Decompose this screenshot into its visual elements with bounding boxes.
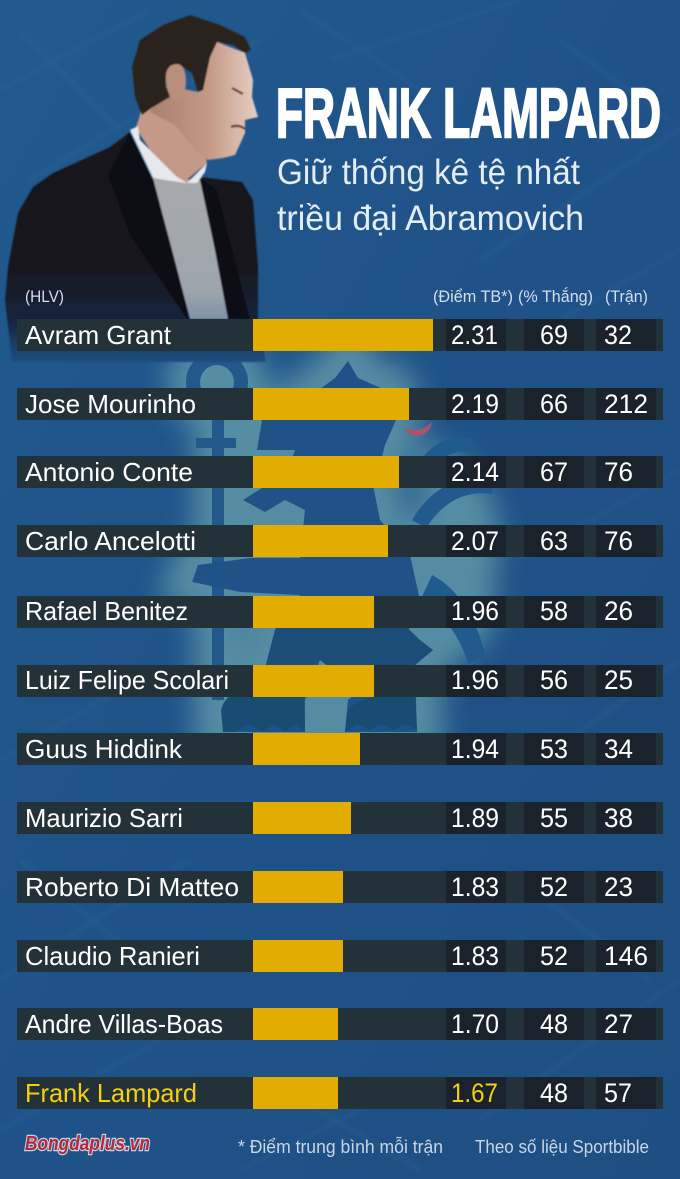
row: Luiz Felipe Scolari: 56 (540, 665, 568, 695)
row: Avram Grant: Avram Grant (25, 320, 172, 350)
lower body shade (266, 628, 433, 665)
column headers: (Trận) (605, 288, 648, 306)
crest glow (167, 332, 500, 732)
column headers: (HLV) (25, 288, 64, 306)
subtitle (277, 153, 584, 238)
row: Luiz Felipe Scolari: 25 (604, 665, 633, 695)
footnote: average points: * Điểm trung bình mỗi trận (238, 1136, 443, 1157)
row: Guus Hiddink: 1.94 (451, 734, 499, 764)
row: Jose Mourinho: Jose Mourinho (25, 389, 196, 419)
row: Maurizio Sarri: 55 (540, 803, 568, 833)
lion tail (412, 437, 494, 663)
row: Guus Hiddink: 53 (540, 734, 568, 764)
row: Carlo Ancelotti: 76 (604, 526, 633, 556)
row: Andre Villas-Boas: 48 (540, 1009, 568, 1039)
row: Carlo Ancelotti (17, 525, 663, 557)
row: Antonio Conte: 67 (540, 457, 568, 487)
row: Rafael Benitez: Rafael Benitez (25, 596, 188, 626)
face (150, 42, 258, 160)
row: Rafael Benitez (17, 596, 663, 628)
row: Avram Grant (17, 319, 663, 351)
row: Carlo Ancelotti: Carlo Ancelotti (25, 526, 196, 556)
row: Claudio Ranieri: 1.83 (451, 941, 499, 971)
row: Claudio Ranieri: 146 (604, 941, 648, 971)
eye and mouth (231, 88, 245, 129)
row: Maurizio Sarri: 38 (604, 803, 633, 833)
row: Frank Lampard: 1.67 (451, 1078, 498, 1108)
row: Antonio Conte: 2.14 (451, 457, 499, 487)
row: Roberto Di Matteo (17, 871, 663, 903)
row: Frank Lampard: Frank Lampard (25, 1078, 197, 1108)
subtitle: triều đại Abramovich (277, 199, 584, 238)
lion tongue (404, 422, 432, 436)
row: Roberto Di Matteo: Roberto Di Matteo (25, 872, 239, 902)
row: Carlo Ancelotti: 2.07 (451, 526, 499, 556)
column headers (25, 287, 648, 306)
row: Luiz Felipe Scolari: Luiz Felipe Scolari (25, 665, 229, 695)
column headers: (% Thắng) (518, 287, 593, 306)
row: Carlo Ancelotti: 63 (540, 526, 568, 556)
row: Roberto Di Matteo: 1.83 (451, 872, 499, 902)
row: Claudio Ranieri (17, 940, 663, 972)
row: Frank Lampard: 57 (604, 1078, 632, 1108)
staff (193, 358, 241, 700)
row: Antonio Conte (17, 456, 663, 488)
logo: Bongdaplus.vn: Bongdaplus.vn (25, 1133, 150, 1155)
row: Avram Grant: 32 (604, 320, 632, 350)
shirt collar (130, 126, 207, 183)
row: Andre Villas-Boas (17, 1008, 663, 1040)
row: Jose Mourinho: 212 (604, 389, 648, 419)
row: Jose Mourinho: 66 (540, 389, 568, 419)
row: Maurizio Sarri: 1.89 (451, 803, 499, 833)
row: Avram Grant: 2.31 (451, 320, 498, 350)
row: Antonio Conte: 76 (604, 457, 633, 487)
row: Luiz Felipe Scolari: 1.96 (451, 665, 499, 695)
row: Frank Lampard: 48 (540, 1078, 568, 1108)
chelsea lion crest watermark (167, 332, 500, 732)
row: Guus Hiddink: Guus Hiddink (25, 734, 183, 764)
lion paws (221, 697, 417, 732)
row: Roberto Di Matteo: 23 (604, 872, 633, 902)
ear (166, 64, 186, 103)
row: Maurizio Sarri (17, 802, 663, 834)
sweater (153, 178, 228, 319)
row: Rafael Benitez: 58 (540, 596, 568, 626)
row: Andre Villas-Boas: 27 (604, 1009, 633, 1039)
row: Jose Mourinho (17, 388, 663, 420)
lion body (192, 361, 433, 732)
source note: Theo số liệu Sportbible (475, 1136, 649, 1157)
row: Antonio Conte: Antonio Conte (25, 457, 193, 487)
row: Rafael Benitez: 26 (604, 596, 633, 626)
row: Maurizio Sarri: Maurizio Sarri (25, 803, 183, 833)
row: Rafael Benitez: 1.96 (451, 596, 499, 626)
row: Frank Lampard (17, 1077, 663, 1109)
row: Claudio Ranieri: Claudio Ranieri (25, 941, 200, 971)
lapel (108, 132, 190, 319)
neck (136, 100, 207, 183)
subtitle: Giữ thống kê tệ nhất (277, 153, 580, 192)
jacket (5, 132, 266, 362)
row: Guus Hiddink (17, 733, 663, 765)
column headers: (Điểm TB*) (433, 288, 513, 306)
row: Guus Hiddink: 34 (604, 734, 633, 764)
portrait: Frank Lampard (5, 15, 266, 362)
row: Roberto Di Matteo: 52 (540, 872, 568, 902)
row: Avram Grant: 69 (540, 320, 568, 350)
row: Claudio Ranieri: 52 (540, 941, 568, 971)
hair (132, 15, 251, 115)
row: Andre Villas-Boas: Andre Villas-Boas (25, 1009, 223, 1039)
row: Luiz Felipe Scolari (17, 665, 663, 697)
row: Jose Mourinho: 2.19 (451, 389, 499, 419)
row: Andre Villas-Boas: 1.70 (451, 1009, 499, 1039)
